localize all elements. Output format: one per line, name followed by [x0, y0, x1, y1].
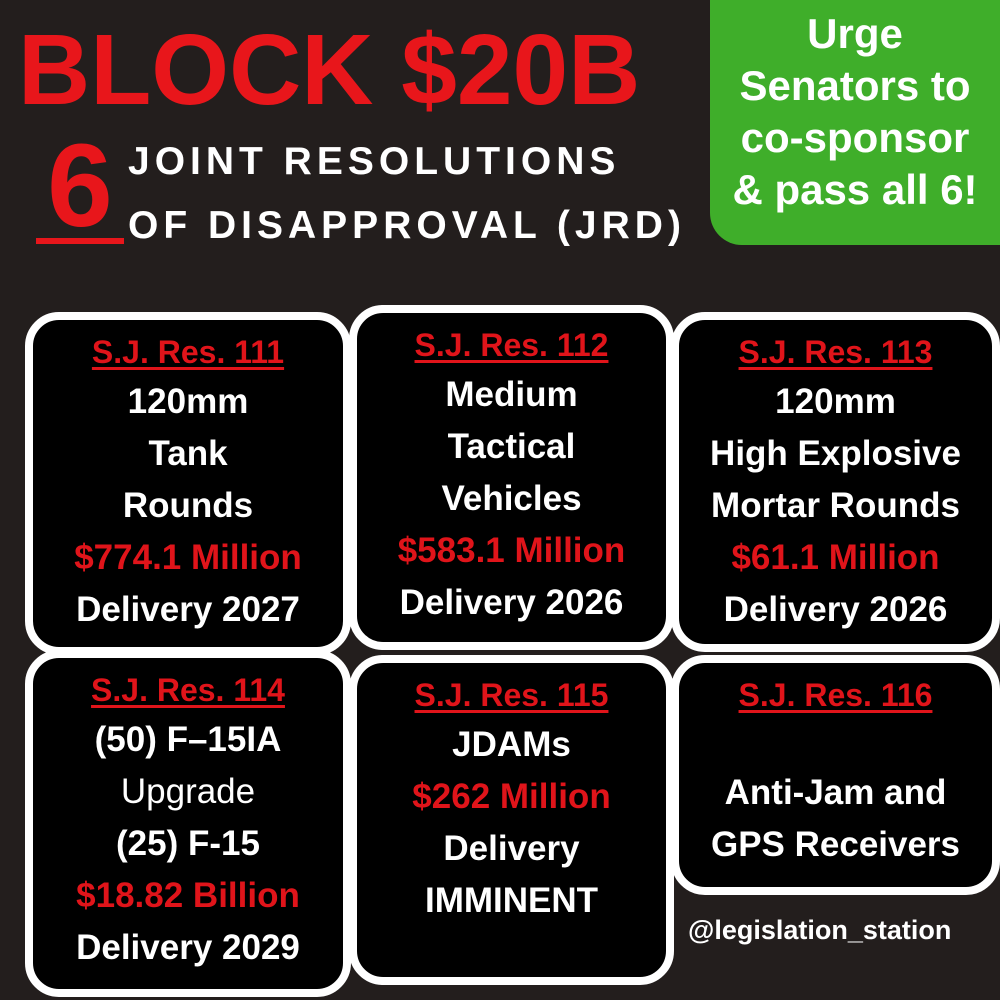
panel: S.J. Res. 112: S.J. Res. 112 — [415, 327, 608, 363]
panel: S.J. Res. 111: Rounds — [123, 486, 253, 525]
panel: S.J. Res. 113: Mortar Rounds — [711, 486, 960, 525]
callout: urge senators: & pass all 6! — [732, 166, 978, 213]
panel: S.J. Res. 116: GPS Receivers — [711, 825, 960, 864]
panel: S.J. Res. 115 — [349, 655, 674, 985]
subtitle text — [128, 140, 686, 247]
subtitle: 6 joint resolutions — [36, 120, 686, 252]
callout: urge senators: Senators to — [739, 62, 971, 109]
title: BLOCK $20B — [18, 14, 640, 126]
callout: urge senators — [710, 0, 1000, 245]
subtitle text: JOINT RESOLUTIONS — [128, 140, 620, 183]
panel: S.J. Res. 114: Delivery 2029 — [76, 928, 300, 967]
panel: S.J. Res. 112: Delivery 2026 — [400, 583, 623, 622]
panel: S.J. Res. 114: S.J. Res. 114 — [91, 672, 285, 708]
panel: S.J. Res. 111: Tank — [148, 434, 228, 473]
panel: S.J. Res. 116 — [671, 655, 1000, 895]
panel: S.J. Res. 111: $774.1 Million — [74, 538, 302, 577]
panel: S.J. Res. 113: High Explosive — [710, 434, 961, 473]
big number 6: 6 — [47, 120, 113, 252]
panel: S.J. Res. 115: JDAMs — [452, 725, 571, 764]
panel: S.J. Res. 115: IMMINENT — [425, 881, 598, 920]
panel: S.J. Res. 114: $18.82 Billion — [76, 876, 300, 915]
panel: S.J. Res. 114 — [25, 650, 351, 997]
panel: S.J. Res. 111 — [25, 312, 351, 655]
panel: S.J. Res. 113: Delivery 2026 — [724, 590, 947, 629]
panel: S.J. Res. 112: Medium — [445, 375, 578, 414]
panel: S.J. Res. 114: (50) F–15IA — [95, 720, 281, 759]
panel: S.J. Res. 113: $61.1 Million — [731, 538, 940, 577]
panel: S.J. Res. 114: Upgrade — [121, 772, 255, 811]
panel: S.J. Res. 114: (25) F-15 — [116, 824, 260, 863]
callout: urge senators: co-sponsor — [741, 114, 969, 161]
panel: S.J. Res. 112: Tactical — [448, 427, 575, 466]
panel: S.J. Res. 113 — [671, 312, 1000, 652]
panel: S.J. Res. 112 — [349, 305, 674, 650]
panel: S.J. Res. 116: S.J. Res. 116 — [739, 677, 932, 713]
panel: S.J. Res. 115: Delivery — [443, 829, 580, 868]
panel: S.J. Res. 113: 120mm — [775, 382, 896, 421]
subtitle text: OF DISAPPROVAL (JRD) — [128, 204, 686, 247]
panel: S.J. Res. 115: $262 Million — [412, 777, 611, 816]
panel: S.J. Res. 111: S.J. Res. 111 — [92, 334, 284, 370]
panel: S.J. Res. 112: Vehicles — [441, 479, 582, 518]
callout: urge senators: Urge — [807, 10, 903, 57]
panel: S.J. Res. 111: Delivery 2027 — [76, 590, 300, 629]
panel: S.J. Res. 116: Anti-Jam and — [725, 773, 946, 812]
panel: S.J. Res. 111: 120mm — [128, 382, 248, 421]
panel: S.J. Res. 113: S.J. Res. 113 — [739, 334, 932, 370]
panel: S.J. Res. 112: $583.1 Million — [398, 531, 625, 570]
big number 6 — [36, 130, 124, 244]
panel: S.J. Res. 115: S.J. Res. 115 — [415, 677, 608, 713]
handle: @legislation_station — [688, 915, 951, 945]
